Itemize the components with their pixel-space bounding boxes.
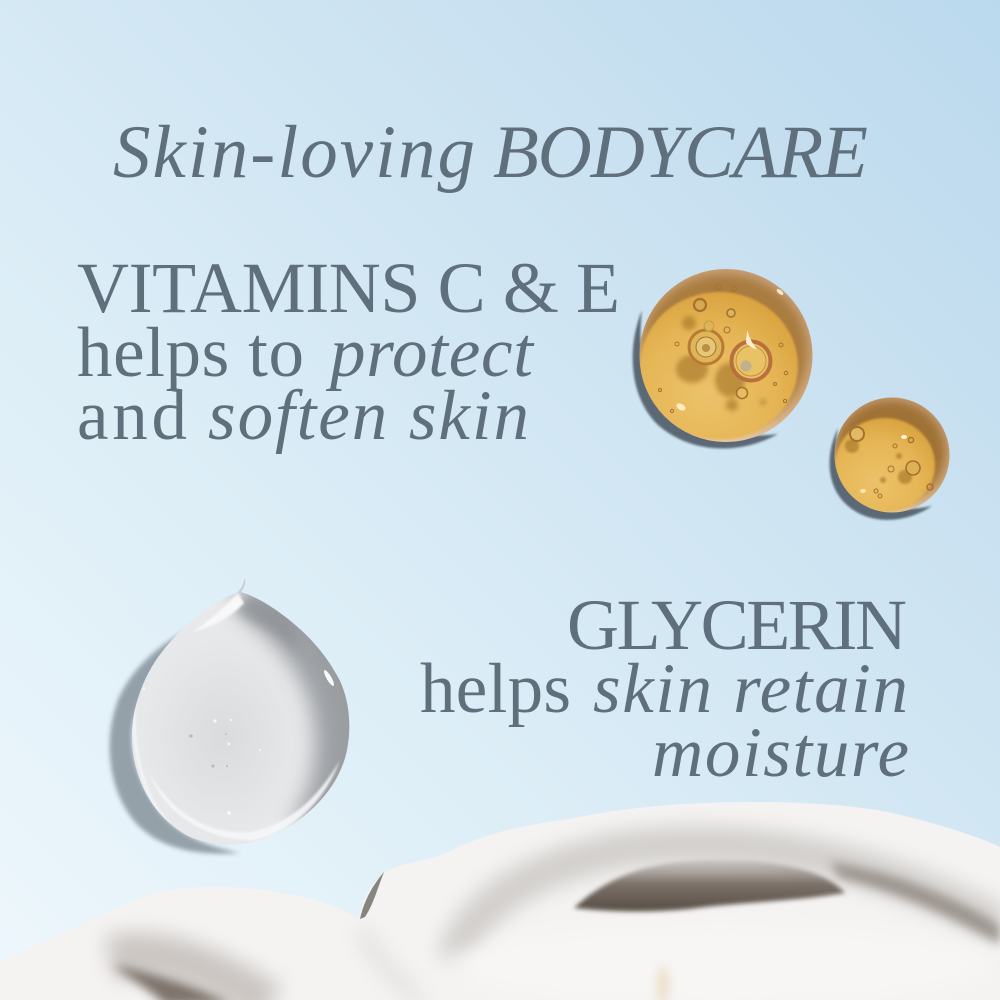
clear glycerin drop xyxy=(110,578,370,854)
text block: vitamins C and E: and xyxy=(77,377,187,455)
title: Skin-loving xyxy=(113,111,475,194)
text block: vitamins C and E: helps to xyxy=(77,314,304,392)
title: BODYCARE xyxy=(493,111,868,194)
small vitamin oil drop xyxy=(830,398,950,520)
oil bubbles xyxy=(658,284,788,413)
small drop bubbles xyxy=(850,427,941,498)
text block: glycerin: helps xyxy=(420,650,571,728)
oil highlights xyxy=(675,288,784,412)
text block: glycerin: GLYCERIN xyxy=(567,585,907,665)
large vitamin oil drop xyxy=(633,269,812,449)
drop shading xyxy=(228,585,350,826)
title xyxy=(113,111,868,194)
text block: vitamins C and E: VITAMINS C & E xyxy=(77,248,620,328)
cream dark streaks xyxy=(830,862,1000,945)
text block: glycerin: moisture xyxy=(652,714,909,792)
cream fold sliver xyxy=(360,872,384,919)
text block: vitamins C and E: protect xyxy=(325,314,535,392)
cream soft shading xyxy=(455,844,1000,960)
white cream swatch xyxy=(0,802,1000,1000)
text block: glycerin: skin retain xyxy=(593,650,908,728)
small drop bubble shadows xyxy=(845,439,912,484)
drop highlights and specks xyxy=(143,669,336,815)
text block: vitamins C and E: soften skin xyxy=(208,377,529,455)
text block: glycerin xyxy=(420,585,909,792)
bubble shadows xyxy=(676,316,766,411)
text block: vitamins C and E xyxy=(77,248,620,455)
